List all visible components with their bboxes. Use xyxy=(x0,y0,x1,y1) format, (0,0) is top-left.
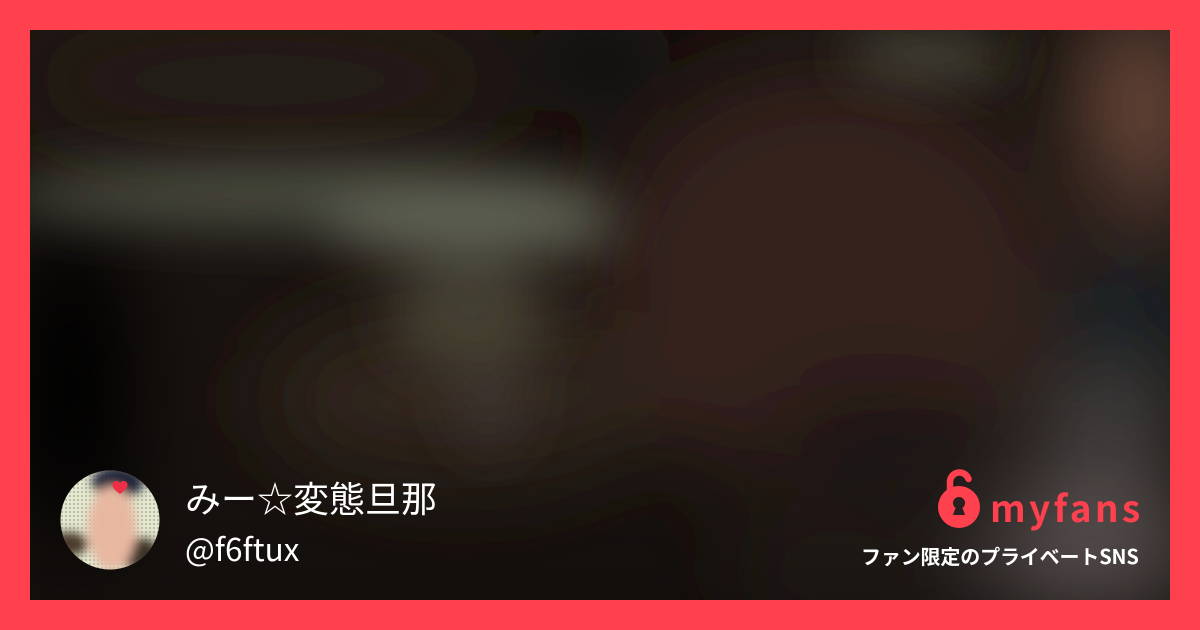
tagline: ファン限定のプライベートSNS xyxy=(861,541,1139,570)
icon: open padlock xyxy=(938,469,980,528)
user handle: @f6ftux xyxy=(185,525,299,571)
avatar: abstract blurred profile image xyxy=(60,470,160,570)
logo: myfans xyxy=(938,469,1144,533)
wordmark: myfans xyxy=(990,479,1144,533)
display name: みー☆変態旦那 xyxy=(185,471,437,523)
icon: red heart xyxy=(112,481,128,494)
